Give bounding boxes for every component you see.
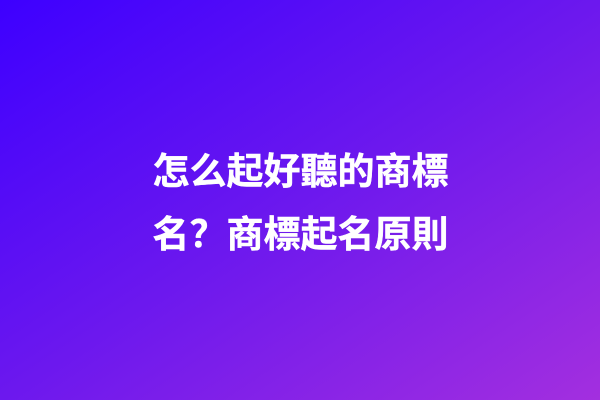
title line 2: 名？商標起名原則: [152, 214, 448, 255]
title: [152, 151, 448, 255]
title line 1: 怎么起好聽的商標: [152, 151, 448, 192]
